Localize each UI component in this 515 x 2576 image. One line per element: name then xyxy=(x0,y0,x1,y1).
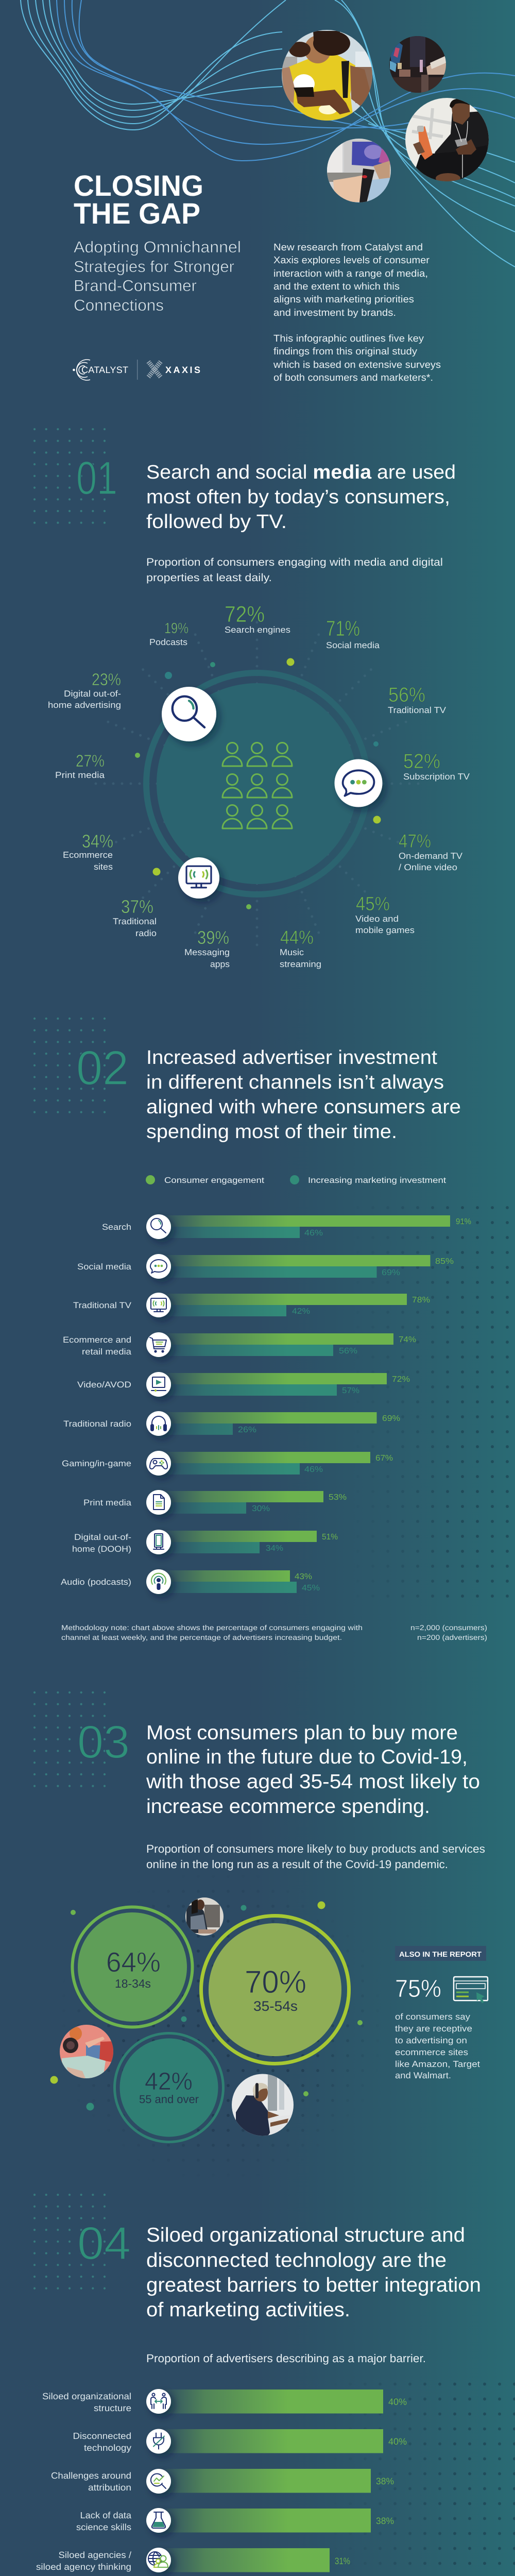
row: traditional tv: Traditional TV xyxy=(73,1301,131,1310)
heading xyxy=(146,1722,480,1818)
heading: greatest barriers to better integration xyxy=(146,2274,481,2296)
description: properties at least daily. xyxy=(146,572,272,584)
description xyxy=(146,556,443,584)
callout: also in the report: of consumers say xyxy=(395,2012,471,2022)
row: print media: 53% xyxy=(329,1493,347,1502)
bubble: 64% 18-34s: 64% xyxy=(106,1947,161,1978)
intro text: aligns with marketing priorities xyxy=(273,294,414,305)
legend: Increasing marketing investment xyxy=(308,1176,447,1185)
stat: ecommerce sites 34% xyxy=(63,831,113,872)
stat: video and mobile games 45%: Video and xyxy=(355,914,399,924)
stat: music streaming 44%: 44% xyxy=(280,927,314,948)
stat: social media 71% xyxy=(326,616,380,650)
callout: also in the report: ecommerce sites xyxy=(395,2047,468,2057)
row: video/avod: Video/AVOD xyxy=(77,1380,131,1389)
methodology note: n=2,000 (consumers) xyxy=(410,1623,487,1632)
accent dots xyxy=(135,658,381,909)
intro text: findings from this original study xyxy=(273,346,418,357)
row: audio podcasts xyxy=(61,1569,320,1594)
stat: subscription tv 52%: Subscription TV xyxy=(403,772,470,782)
row: search: 46% xyxy=(304,1229,323,1238)
stat: podcasts 19% xyxy=(149,620,188,647)
description xyxy=(146,1842,485,1871)
row: siloed agencies: Siloed agencies / xyxy=(59,2550,131,2560)
row: disconnected technology: 40% xyxy=(388,2436,407,2447)
photo: person with tablet xyxy=(60,2025,113,2078)
row: lack of data science skills xyxy=(76,2508,394,2533)
stat: messaging apps 39%: apps xyxy=(210,959,230,969)
row: siloed agencies: siloed agency thinking xyxy=(36,2562,131,2572)
description: Proportion of consumers more likely to buy products and services xyxy=(146,1842,485,1855)
heading: aligned with where consumers are xyxy=(146,1096,461,1118)
heading: Increased advertiser investment xyxy=(146,1047,437,1069)
callout: also in the report: ALSO IN THE REPORT xyxy=(399,1950,482,1958)
bubble: 70% 35-54s: 70% xyxy=(245,1964,306,2000)
intro text: and investment by brands. xyxy=(273,308,396,318)
panel: finding 04 xyxy=(29,2189,515,2576)
row: video/avod: 72% xyxy=(392,1375,410,1384)
stat: search engines 72%: 72% xyxy=(225,602,265,627)
row: social media xyxy=(77,1254,454,1279)
stat: traditional radio 37% xyxy=(113,896,157,938)
description: online in the long run as a result of the Covid-19 pandemic. xyxy=(146,1858,448,1871)
photo: woman with phone xyxy=(282,30,373,122)
heading: followed by TV. xyxy=(146,511,287,533)
description: Proportion of advertisers describing as a major barrier. xyxy=(146,2352,426,2365)
row: lack of data science skills: science skills xyxy=(76,2522,131,2532)
icon: tv xyxy=(178,857,219,899)
bar chart: engagement vs investment xyxy=(61,1200,515,1603)
stat: on-demand tv 47%: 47% xyxy=(399,831,431,852)
callout: also in the report: to advertising on xyxy=(395,2036,467,2045)
title xyxy=(74,170,203,230)
intro text: which is based on extensive surveys xyxy=(273,360,441,370)
legend xyxy=(146,1175,447,1185)
row: digital out-of-home: Digital out-of- xyxy=(74,1533,131,1542)
stat: on-demand tv 47% xyxy=(399,831,463,872)
intro text: interaction with a range of media, xyxy=(273,268,428,279)
intro text xyxy=(273,242,441,383)
legend: Consumer engagement xyxy=(164,1176,265,1185)
heading: most often by today’s consumers, xyxy=(146,486,450,508)
stat: messaging apps 39%: Messaging xyxy=(184,947,230,957)
row: search: Search xyxy=(102,1223,131,1232)
bubble: 70% 35-54s xyxy=(201,1916,349,2064)
heading xyxy=(146,462,456,533)
callout: also in the report: they are receptive xyxy=(395,2024,472,2033)
logos: Catalyst and Xaxis xyxy=(73,360,200,380)
accent dots xyxy=(50,1901,363,2110)
row: audio podcasts: 45% xyxy=(302,1584,320,1592)
panel: finding 02 xyxy=(29,1013,515,1641)
intro text: Xaxis explores levels of consumer xyxy=(273,255,430,266)
heading: increase ecommerce spending. xyxy=(146,1795,430,1818)
row: traditional tv: 78% xyxy=(412,1296,430,1304)
callout: also in the report: 75% xyxy=(395,1975,441,2003)
background dots xyxy=(93,1905,349,2146)
icon: people grid xyxy=(222,743,292,828)
stat: messaging apps 39% xyxy=(184,927,230,969)
radial chart xyxy=(48,602,470,969)
photo: hand with remote xyxy=(327,139,391,202)
stat: traditional radio 37%: Traditional xyxy=(113,917,157,926)
bubble: 64% 18-34s: 18-34s xyxy=(115,1977,151,1990)
stat: digital out-of-home 23%: home advertising xyxy=(48,700,121,710)
methodology note: n=200 (advertisers) xyxy=(417,1633,487,1641)
stat: video and mobile games 45%: 45% xyxy=(356,893,390,915)
stat: print media 27%: Print media xyxy=(55,770,105,780)
row: ecommerce and retail media: retail media xyxy=(82,1347,132,1357)
bubble: 42% 55 and over xyxy=(114,2033,224,2142)
row: disconnected technology: technology xyxy=(84,2443,131,2453)
methodology note xyxy=(61,1623,487,1641)
stat: digital out-of-home 23%: Digital out-of- xyxy=(64,689,121,699)
stat: search engines 72%: Search engines xyxy=(225,625,290,635)
intro text: of both consumers and marketers*. xyxy=(273,372,433,383)
row: video/avod xyxy=(77,1372,410,1397)
decorative dot grid xyxy=(29,2189,110,2294)
heading: spending most of their time. xyxy=(146,1121,397,1143)
stat: on-demand tv 47%: / Online video xyxy=(399,862,457,872)
decorative dot grid xyxy=(29,423,110,529)
stat: traditional radio 37%: 37% xyxy=(121,896,153,917)
methodology note: Methodology note: chart above shows the percentage of consumers engaging with xyxy=(61,1623,363,1632)
bubble chart xyxy=(50,1897,363,2146)
callout: also in the report: and Walmart. xyxy=(395,2071,451,2080)
row: digital out-of-home: 34% xyxy=(266,1544,283,1553)
row: disconnected technology: Disconnected xyxy=(73,2431,131,2441)
sunburst faint dots xyxy=(92,619,422,948)
bubble: 70% 35-54s: 35-54s xyxy=(253,1998,298,2014)
heading: with those aged 35-54 most likely to xyxy=(146,1771,480,1793)
row: print media xyxy=(83,1490,347,1515)
heading: Siloed organizational structure and xyxy=(146,2224,465,2246)
stat: digital out-of-home 23% xyxy=(48,670,121,710)
background dots xyxy=(402,1206,509,1598)
heading: Search and social media are used xyxy=(146,462,456,483)
row: challenges around attribution: attribution xyxy=(88,2482,131,2493)
row: siloed agencies xyxy=(36,2548,350,2572)
callout: also in the report xyxy=(395,1946,488,2080)
row: digital out-of-home: 51% xyxy=(322,1533,338,1541)
row: ecommerce and retail media: Ecommerce and xyxy=(63,1335,131,1345)
decorative dot grid xyxy=(29,1013,110,1118)
outer ring xyxy=(146,673,368,894)
row: traditional tv: 42% xyxy=(292,1307,310,1316)
stat: on-demand tv 47%: On-demand TV xyxy=(399,851,463,861)
row: social media: 69% xyxy=(382,1268,400,1277)
row: social media: 85% xyxy=(435,1257,454,1266)
row: video/avod: 57% xyxy=(342,1386,359,1395)
decorative wave lines xyxy=(21,0,515,267)
callout: also in the report: like Amazon, Target xyxy=(395,2059,480,2069)
row: gaming/in-game: 67% xyxy=(375,1454,393,1463)
heading: disconnected technology are the xyxy=(146,2249,447,2272)
section number 01: 01 xyxy=(76,452,117,504)
logos: Catalyst and Xaxis: XAXIS xyxy=(165,365,200,375)
icon: magnifier xyxy=(162,687,216,741)
panel: header xyxy=(21,0,515,383)
panel: finding 01 xyxy=(29,423,470,969)
icon: chat xyxy=(335,759,382,807)
subtitle: Strategies for Stronger xyxy=(74,258,234,276)
stat: print media 27%: 27% xyxy=(76,751,105,770)
row: gaming/in-game: 46% xyxy=(304,1465,323,1474)
stat: traditional radio 37%: radio xyxy=(135,928,157,938)
stat: traditional tv 56%: Traditional TV xyxy=(388,705,447,715)
subtitle: Adopting Omnichannel xyxy=(74,238,241,256)
heading xyxy=(146,1047,461,1143)
row: social media: Social media xyxy=(77,1262,132,1272)
logos: Catalyst and Xaxis: CATALYST xyxy=(81,365,128,375)
stat: traditional tv 56%: 56% xyxy=(388,684,425,706)
row: digital out-of-home: home (DOOH) xyxy=(72,1545,131,1554)
row: traditional radio: Traditional radio xyxy=(63,1419,131,1429)
photo: man with phone and bottle xyxy=(405,98,492,183)
stat: print media 27% xyxy=(55,751,105,780)
bubble: 42% 55 and over: 55 and over xyxy=(139,2093,199,2106)
heading: online in the future due to Covid-19, xyxy=(146,1746,468,1768)
row: print media: Print media xyxy=(83,1498,132,1507)
subtitle: Connections xyxy=(74,296,164,314)
section number 04: 04 xyxy=(77,2218,131,2269)
row: traditional radio: 26% xyxy=(238,1426,256,1434)
stat: music streaming 44% xyxy=(280,927,321,969)
row: ecommerce and retail media: 56% xyxy=(339,1347,357,1355)
heading xyxy=(146,2224,481,2321)
stat: ecommerce sites 34%: 34% xyxy=(82,831,113,852)
stat: digital out-of-home 23%: 23% xyxy=(92,670,121,689)
section number 02: 02 xyxy=(76,1041,129,1095)
row: siloed organizational structure: structure xyxy=(94,2403,131,2413)
bar chart: barriers xyxy=(36,2377,515,2576)
stat: video and mobile games 45% xyxy=(355,893,415,935)
bubble: 42% 55 and over: 42% xyxy=(145,2068,193,2095)
title: CLOSING xyxy=(74,170,203,202)
row: ecommerce and retail media xyxy=(63,1332,416,1357)
stat: ecommerce sites 34%: Ecommerce xyxy=(63,850,113,860)
stat: messaging apps 39%: 39% xyxy=(197,927,229,948)
stat: search engines 72% xyxy=(225,602,290,635)
heading: in different channels isn’t always xyxy=(146,1072,444,1093)
stat: social media 71%: Social media xyxy=(326,640,380,650)
stat: video and mobile games 45%: mobile games xyxy=(355,925,415,935)
row: print media: 30% xyxy=(252,1504,270,1513)
row: audio podcasts: Audio (podcasts) xyxy=(61,1578,131,1587)
row: gaming/in-game xyxy=(62,1451,393,1476)
row: lack of data science skills: 38% xyxy=(376,2516,394,2526)
stat: podcasts 19%: Podcasts xyxy=(149,637,187,647)
photo: city at night xyxy=(389,36,446,93)
row: audio podcasts: 43% xyxy=(295,1572,312,1581)
row: gaming/in-game: Gaming/in-game xyxy=(62,1459,131,1468)
row: search: 91% xyxy=(456,1217,471,1226)
row: traditional radio xyxy=(63,1411,400,1436)
stat: ecommerce sites 34%: sites xyxy=(94,862,113,872)
description: Proportion of consumers engaging with media and digital xyxy=(146,556,443,568)
stat: music streaming 44%: Music xyxy=(280,947,304,957)
row: siloed organizational structure xyxy=(42,2389,407,2414)
stat: traditional tv 56% xyxy=(388,684,447,715)
row: digital out-of-home xyxy=(72,1530,338,1554)
inner disc xyxy=(157,683,357,884)
row: ecommerce and retail media: 74% xyxy=(399,1335,416,1344)
intro text: This infographic outlines five key xyxy=(273,333,424,344)
heading: Most consumers plan to buy more xyxy=(146,1722,458,1744)
row: siloed agencies: 31% xyxy=(335,2556,350,2566)
row: traditional tv xyxy=(73,1293,430,1317)
stat: podcasts 19%: 19% xyxy=(164,620,188,637)
subtitle: Brand-Consumer xyxy=(74,277,197,295)
stat: social media 71%: 71% xyxy=(326,616,360,640)
row: siloed organizational structure: 40% xyxy=(388,2397,407,2407)
row: challenges around attribution: 38% xyxy=(376,2476,394,2486)
methodology note: channel at least weekly, and the percentage of advertisers increasing budget. xyxy=(61,1633,342,1641)
intro text: and the extent to which this xyxy=(273,281,400,292)
stat: music streaming 44%: streaming xyxy=(280,959,321,969)
section number 03: 03 xyxy=(77,1717,130,1768)
row: lack of data science skills: Lack of data xyxy=(80,2510,131,2520)
background dots xyxy=(379,2382,515,2565)
bubble: 64% 18-34s xyxy=(72,1907,193,2027)
title: THE GAP xyxy=(74,197,200,230)
decorative dot grid xyxy=(29,1687,110,1792)
photo: woman at laptop xyxy=(185,1897,224,1936)
panel: finding 03 xyxy=(29,1687,488,2182)
stat: subscription tv 52%: 52% xyxy=(403,750,440,773)
icon: browser window xyxy=(454,1977,488,2003)
row: traditional radio: 69% xyxy=(382,1414,400,1423)
photo: older man with headphones xyxy=(232,2074,294,2137)
subtitle xyxy=(74,238,241,314)
row: challenges around attribution: Challenges around xyxy=(51,2470,131,2481)
row: siloed organizational structure: Siloed organizational xyxy=(42,2391,131,2401)
row: search xyxy=(102,1214,471,1239)
intro text: New research from Catalyst and xyxy=(273,242,423,253)
stat: subscription tv 52% xyxy=(403,750,470,782)
row: disconnected technology xyxy=(73,2429,407,2453)
row: challenges around attribution xyxy=(51,2469,394,2494)
heading: of marketing activities. xyxy=(146,2299,350,2321)
